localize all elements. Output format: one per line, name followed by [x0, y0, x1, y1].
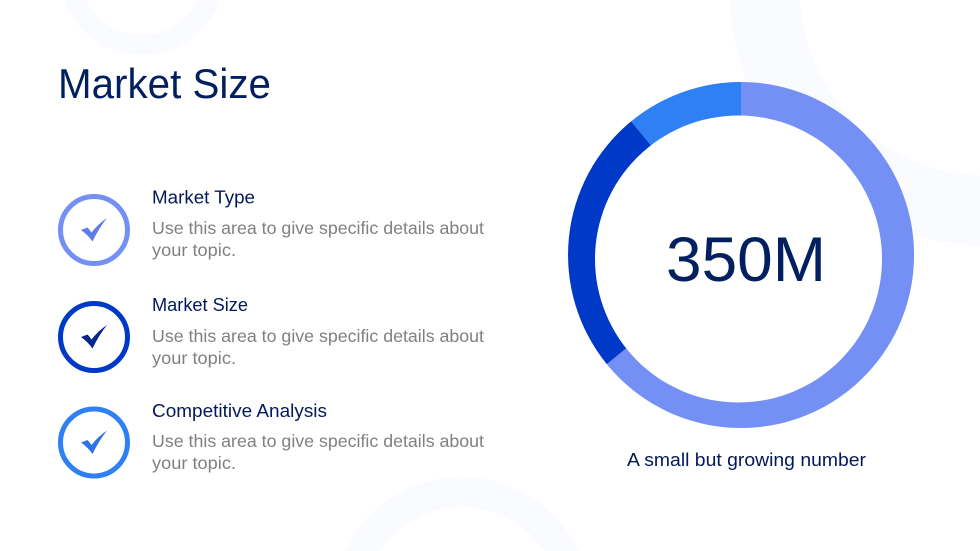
- donut value: 350M: [666, 225, 826, 295]
- title: Market Size: [58, 60, 271, 107]
- item: market size: [60, 294, 484, 370]
- icon: medium blue check circle: [60, 409, 128, 476]
- icon: dark blue check circle: [60, 304, 128, 370]
- donut chart: [568, 82, 914, 428]
- heading: competitive analysis: Competitive Analysis: [152, 400, 327, 421]
- text block: market type details: your topic.: [152, 240, 236, 260]
- heading: market size: Market Size: [152, 294, 248, 315]
- text block: market type details: Use this area to give specific details about: [152, 218, 484, 238]
- text block: market size details: [152, 326, 484, 368]
- text block: competitive analysis details: [152, 431, 484, 473]
- donut caption: A small but growing number: [627, 449, 866, 470]
- text block: competitive analysis details: your topic.: [152, 453, 236, 473]
- text block: market size details: your topic.: [152, 348, 236, 368]
- item: competitive analysis: [60, 400, 484, 476]
- text block: market size details: Use this area to give specific details about: [152, 326, 484, 346]
- item: market type: [60, 186, 484, 264]
- icon: light blue check circle: [60, 196, 128, 264]
- heading: market type: Market Type: [152, 186, 255, 208]
- text block: competitive analysis details: Use this area to give specific details about: [152, 431, 484, 451]
- text block: market type details: [152, 218, 484, 260]
